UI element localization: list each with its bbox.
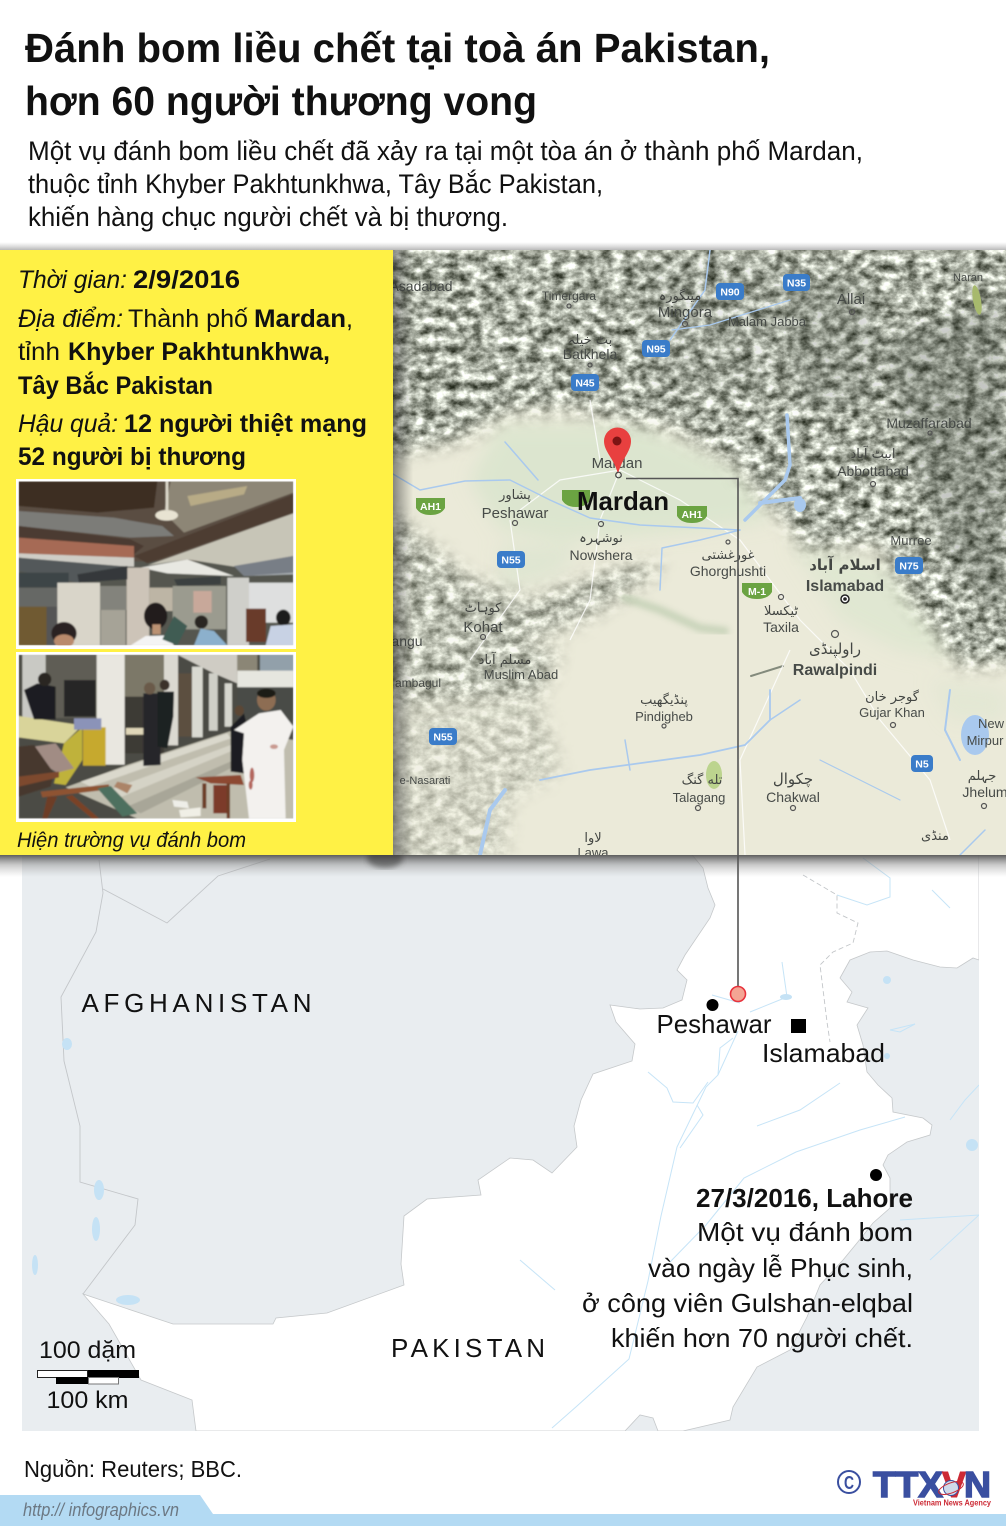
shadows around band: [0, 855, 1006, 877]
place labels: Taxila: [763, 619, 799, 635]
place labels: Malam Jabba: [728, 314, 807, 329]
urdu labels: پنڈیگھیب: [640, 692, 688, 708]
urdu labels: اسلام آباد: [809, 556, 881, 574]
Pakistan territory: [83, 850, 979, 1431]
urdu labels: چکوال: [773, 770, 813, 788]
place labels: Muslim Abad: [484, 667, 558, 682]
place labels: Talagang: [673, 790, 725, 805]
panel: key facts: [0, 250, 393, 855]
map scale: [38, 1337, 139, 1414]
urdu labels: غورغشتی: [702, 548, 755, 563]
urdu labels: گوجر خان: [865, 689, 920, 705]
place labels: Kohat: [463, 619, 503, 636]
map scale: 100 dặm: [39, 1337, 136, 1364]
darker eastern ranges: [880, 300, 1006, 620]
place labels: ambagul: [395, 676, 441, 690]
place labels: Gujar Khan: [859, 705, 925, 720]
road badges: AH1: [420, 501, 441, 513]
rivers: [393, 250, 985, 855]
place labels: Islamabad: [806, 578, 884, 595]
place labels: Abbottabad: [837, 463, 909, 479]
urdu labels: جہلم: [968, 769, 996, 784]
urdu labels: منڈی: [921, 829, 949, 844]
place labels: Rawalpindi: [793, 662, 877, 679]
footer band: http:// infographics.vn: [23, 1500, 179, 1520]
road badges: AH1: [681, 509, 703, 521]
facts text: tỉnh: [18, 338, 60, 366]
place labels: [389, 272, 1006, 860]
label: Mardan: Mardan: [577, 486, 669, 516]
logo: TTXVN: C: [844, 1473, 854, 1493]
facts text: 52 người bị thương: [18, 443, 246, 471]
callout: Lahore attack: vào ngày lễ Phục sinh,: [648, 1253, 913, 1283]
title: [25, 25, 770, 124]
place labels: Chakwal: [766, 789, 820, 805]
intro text: [28, 136, 863, 232]
place labels: Nowshera: [569, 547, 633, 563]
intro text: thuộc tỉnh Khyber Pakhtunkhwa, Tây Bắc Pakistan,: [28, 168, 603, 199]
photo: police at the scene: [16, 652, 296, 822]
urdu labels: پشاور: [498, 488, 531, 503]
title: Đánh bom liều chết tại toà án Pakistan,: [25, 25, 770, 71]
logo: TTXVN: [838, 1464, 991, 1508]
road badges: M-1: [748, 586, 766, 598]
facts text: Thời gian:: [18, 266, 127, 294]
road badges: N35: [787, 278, 806, 290]
mountain relief: [385, 240, 1006, 870]
place labels: Timergara: [542, 289, 596, 303]
urdu labels: [465, 288, 996, 846]
facts text: [18, 266, 367, 471]
marker: Islamabad: Islamabad: [762, 1038, 885, 1068]
urdu labels: تله گنگ: [682, 772, 723, 788]
road badges: N5: [915, 758, 929, 770]
urdu labels: ٹیکسلا: [764, 604, 798, 619]
facts text: Khyber Pakhtunkhwa,: [68, 338, 330, 366]
place labels: Mirpur: [967, 733, 1004, 748]
connector line from Mardan to overview marker: [626, 478, 738, 987]
borders: [61, 859, 858, 1294]
marker: Lahore: [870, 1169, 882, 1181]
road badges: [416, 274, 933, 772]
panel: terrain map: [385, 240, 1006, 870]
city point markers: [480, 304, 986, 810]
place labels: Asadabad: [389, 278, 453, 294]
roads: [470, 400, 950, 855]
place labels: New: [978, 716, 1005, 731]
marker: Peshawar: Peshawar: [656, 1009, 772, 1039]
plains: [475, 426, 934, 649]
photo caption: Hiện trường vụ đánh bom: [17, 829, 246, 852]
place labels: angu: [391, 633, 423, 649]
urdu labels: مسلم آباد: [479, 651, 531, 668]
road badges: N55: [433, 732, 453, 744]
urdu labels: نوشہرہ: [579, 531, 623, 546]
urdu labels: راولپنڈی: [809, 640, 861, 659]
label: Pakistan: PAKISTAN: [391, 1333, 545, 1363]
logo: TTXVN: Vietnam News Agency: [913, 1498, 991, 1508]
logo: TTXVN: TTX: [873, 1464, 943, 1505]
footer band: [0, 1495, 1006, 1526]
callout: Lahore attack: Một vụ đánh bom: [697, 1217, 913, 1247]
facts text: 12 người thiệt mạng: [124, 410, 367, 438]
facts text: Thành phố: [128, 305, 248, 333]
source: Nguồn: Reuters; BBC.: [24, 1456, 242, 1482]
urdu labels: بٹ خیلہ: [568, 333, 612, 348]
place labels: Mingora: [658, 304, 713, 321]
place labels: Pindigheb: [635, 709, 693, 724]
place labels: Mardan: [592, 455, 642, 472]
panel: regional overview map: [22, 850, 979, 1431]
panel shadow on map: [393, 250, 413, 855]
callout: Lahore attack: khiến hơn 70 người chết.: [611, 1323, 913, 1353]
road badges: N90: [720, 286, 740, 298]
rivers: [520, 858, 979, 1428]
place labels: Muzaffarabad: [886, 415, 972, 431]
facts text: Địa điểm:: [18, 305, 123, 333]
title: hơn 60 người thương vong: [25, 78, 537, 124]
lakes: [32, 976, 978, 1305]
place labels: e-Nasarati: [400, 775, 450, 787]
facts text: ,: [346, 305, 353, 333]
callout: Lahore attack: 27/3/2016, Lahore: [696, 1183, 913, 1213]
place labels: Ghorghushti: [690, 563, 766, 579]
place labels: Murree: [890, 533, 932, 548]
map scale: 100 km: [46, 1387, 128, 1414]
place labels: Batkhela: [563, 346, 617, 362]
urdu labels: ایبٹ آباد: [850, 445, 896, 462]
intro text: Một vụ đánh bom liều chết đã xảy ra tại một tòa án ở thành phố Mardan,: [28, 136, 863, 166]
photo: damaged ceiling: [16, 479, 296, 649]
facts text: Tây Bắc Pakistan: [18, 370, 213, 400]
road badges: N95: [646, 344, 666, 356]
facts text: 2/9/2016: [133, 266, 240, 294]
place labels: Lawa: [577, 845, 609, 860]
road badges: N75: [899, 560, 919, 572]
facts text: Hậu quả:: [18, 410, 118, 438]
place labels: Naran: [953, 272, 983, 284]
location pin: [604, 428, 631, 478]
facts text: Mardan: [254, 305, 346, 333]
callout: Lahore attack: [582, 1183, 913, 1353]
marker: Mardan attack site: [730, 986, 746, 1002]
urdu labels: مینگورہ: [659, 288, 701, 304]
place labels: Peshawar: [482, 505, 548, 522]
ridges in the plains: [625, 598, 783, 676]
label: Afghanistan: AFGHANISTAN: [82, 988, 312, 1018]
place labels: Allai: [837, 291, 865, 308]
logo: TTXVN: N: [964, 1464, 991, 1505]
urdu labels: لاوا: [584, 831, 602, 846]
urdu labels: کوہاٹ: [465, 601, 502, 616]
marker: Islamabad: [762, 1019, 885, 1068]
callout: Lahore attack: ở công viên Gulshan-elqbal: [582, 1288, 913, 1318]
intro text: khiến hàng chục người chết và bị thương.: [28, 202, 508, 232]
logo: TTXVN: V: [942, 1464, 966, 1505]
road badges: N55: [501, 554, 521, 566]
road badges: N45: [575, 378, 595, 390]
